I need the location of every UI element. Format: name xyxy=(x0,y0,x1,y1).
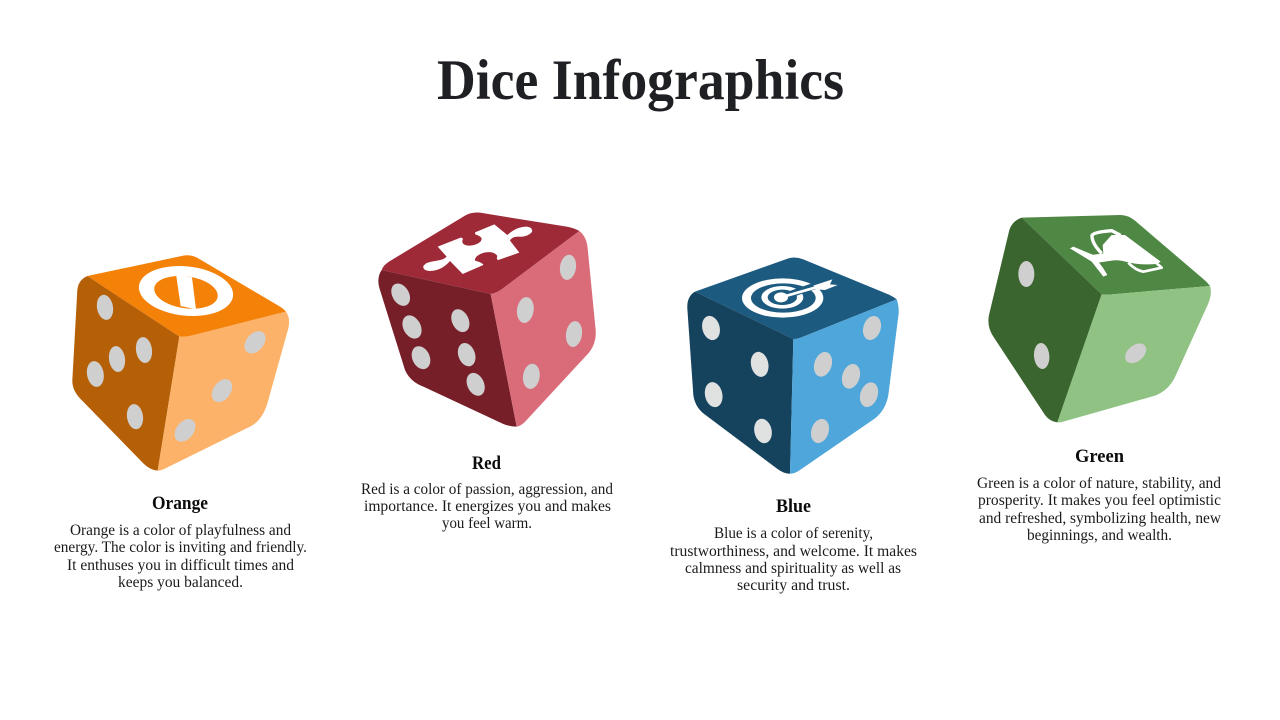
orange die xyxy=(72,255,289,471)
orange heading: Orange xyxy=(152,494,208,514)
red text: importance. It energizes you and makes xyxy=(364,498,611,515)
red text: Red is a color of passion, aggression, and xyxy=(361,481,613,498)
panel: blue xyxy=(670,258,917,594)
title: Dice Infographics xyxy=(437,49,844,112)
green text: Green is a color of nature, stability, and xyxy=(977,475,1221,492)
panel: orange xyxy=(54,255,307,591)
green text xyxy=(977,475,1221,544)
icon: no sign xyxy=(136,262,236,320)
red die xyxy=(378,212,596,427)
blue text: calmness and spirituality as well as xyxy=(685,560,901,577)
icon: trophy xyxy=(1070,231,1162,277)
green die xyxy=(988,215,1211,422)
panel: green xyxy=(977,215,1221,544)
red text xyxy=(361,481,613,532)
green text: and refreshed, symbolizing health, new xyxy=(979,510,1221,527)
blue text: security and trust. xyxy=(737,577,850,594)
green text: beginnings, and wealth. xyxy=(1027,527,1172,544)
red text: you feel warm. xyxy=(442,515,532,532)
green text: prosperity. It makes you feel optimistic xyxy=(978,492,1221,509)
red heading: Red xyxy=(472,454,502,474)
panel: red xyxy=(361,212,613,532)
orange text: keeps you balanced. xyxy=(118,574,243,591)
orange text: Orange is a color of playfulness and xyxy=(70,522,291,539)
blue text: trustworthiness, and welcome. It makes xyxy=(670,543,917,560)
blue heading: Blue xyxy=(776,497,811,517)
green heading: Green xyxy=(1075,447,1125,467)
blue text: Blue is a color of serenity, xyxy=(714,525,873,542)
orange text: energy. The color is inviting and friendly. xyxy=(54,539,307,556)
icon: puzzle piece xyxy=(423,224,532,274)
blue text xyxy=(670,525,917,594)
orange text: It enthuses you in difficult times and xyxy=(67,557,294,574)
blue die xyxy=(687,258,899,474)
icon: target with arrow xyxy=(742,278,838,318)
orange text xyxy=(54,522,307,591)
